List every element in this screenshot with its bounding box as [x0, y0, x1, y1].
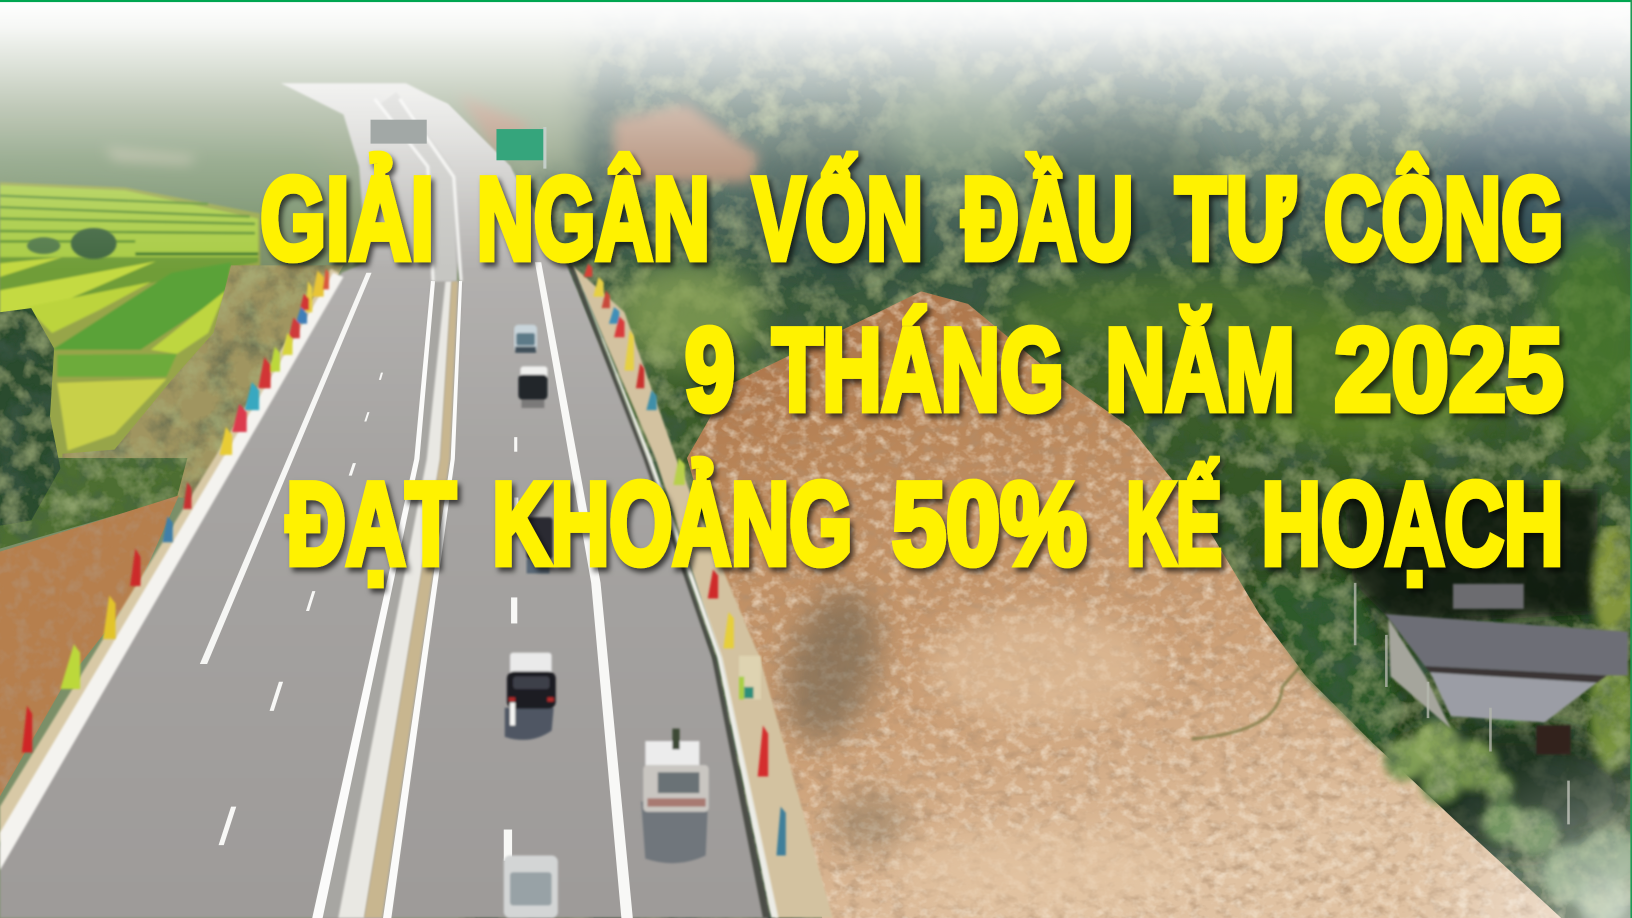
car: silver — [504, 856, 558, 918]
flags: left roadside — [22, 269, 329, 753]
title line 1: NGÂN — [477, 153, 710, 284]
light patch in slope — [895, 609, 1187, 909]
guardrail right highlight — [573, 265, 779, 918]
title line 2: 2025 — [1334, 304, 1563, 435]
dark shade behind house — [1343, 489, 1598, 624]
fence posts — [1355, 583, 1569, 824]
panel: forest hillside — [458, 0, 1632, 918]
soil streaks light — [666, 281, 1582, 918]
soil streaks dark — [666, 281, 1582, 918]
atmosphere: bottom right fade — [1249, 624, 1632, 918]
icon: small trees in fields — [27, 228, 117, 259]
car: dark SUV — [505, 653, 556, 740]
title line 2: NĂM — [1105, 304, 1295, 435]
median gutter — [312, 281, 462, 918]
car: dark — [518, 366, 547, 408]
flags: right roadside — [584, 263, 786, 856]
median right line — [383, 281, 462, 918]
green direction sign — [496, 127, 546, 169]
right edge line — [535, 262, 633, 918]
title line 1: ĐẦU — [962, 153, 1133, 284]
lane dashes right — [504, 437, 518, 861]
dark streak in slope — [770, 579, 909, 851]
title line 1: VỐN — [753, 153, 923, 284]
crack in slope — [1192, 656, 1309, 739]
left shoulder tan — [0, 269, 339, 843]
forest tone patches — [531, 73, 1632, 853]
panel: right dirt slope — [666, 281, 1582, 918]
median tan strip — [364, 281, 458, 918]
title line 2: THÁNG — [772, 304, 1064, 435]
hillside clearing — [104, 94, 760, 182]
title line 2: 9 — [685, 304, 735, 435]
panel: right-side bushes — [1254, 526, 1632, 918]
panel: distant hills left — [0, 0, 583, 234]
title line 1: GIẢI — [260, 153, 434, 284]
panel: right shoulder — [572, 265, 833, 918]
panel: right road bed — [375, 88, 768, 918]
lane dashes left — [219, 373, 383, 845]
title — [260, 153, 1563, 589]
title line 3: KẾ — [1126, 458, 1222, 589]
car: white truck — [641, 729, 709, 863]
panel: rice terraces — [0, 182, 260, 458]
upper median — [375, 99, 461, 281]
overhead sign — [371, 120, 427, 144]
right green rule — [1630, 0, 1632, 918]
guardrail left — [0, 273, 343, 870]
panel: left roadside scrub — [0, 265, 343, 549]
roadside signboard — [739, 656, 761, 699]
title line 1: TƯ — [1175, 153, 1295, 284]
median white strip — [338, 281, 452, 918]
title line 3: KHOẢNG — [492, 458, 852, 589]
car: behind title — [527, 517, 553, 573]
edge line left carriageway — [200, 273, 372, 664]
car: small blue-white — [514, 325, 537, 353]
title line 3: 50% — [892, 458, 1087, 589]
atmosphere: top right fade — [1145, 0, 1632, 187]
panel: house with metal roof — [1385, 584, 1628, 755]
title line 3: ĐẠT — [286, 458, 456, 589]
panel: left dirt bank — [0, 495, 179, 796]
median left line — [312, 281, 435, 918]
top green rule — [0, 0, 1632, 2]
atmosphere: top haze — [0, 0, 1632, 271]
guardrail right dark — [568, 265, 770, 918]
icon: trees left — [0, 308, 60, 526]
panel: left road bed — [0, 83, 536, 918]
